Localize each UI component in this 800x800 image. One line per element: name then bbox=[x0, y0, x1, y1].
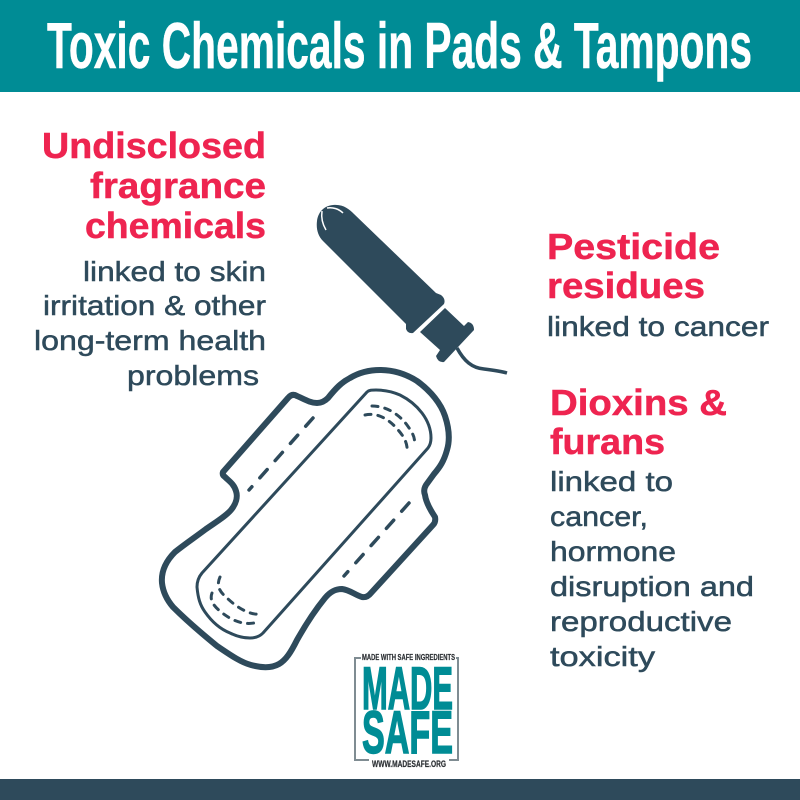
description: fragrance health effects: problems bbox=[127, 360, 259, 391]
heading: pesticide residues bbox=[547, 226, 720, 306]
logo wordmark made: MADE bbox=[362, 655, 453, 722]
logo top text: MADE WITH SAFE INGREDIENTS bbox=[362, 653, 455, 662]
description: fragrance health effects: long-term health bbox=[34, 325, 266, 356]
heading: pesticide residues: Pesticide bbox=[547, 226, 720, 267]
description: fragrance health effects bbox=[34, 256, 266, 391]
text block: dioxins and furans bbox=[550, 382, 754, 672]
description: dioxin health effects: linked to bbox=[550, 466, 673, 497]
logo: made safe bbox=[355, 653, 458, 769]
heading: undisclosed fragrance chemicals bbox=[42, 125, 266, 246]
description: dioxin health effects: reproductive bbox=[550, 606, 732, 637]
pad wing stitching bbox=[249, 418, 313, 490]
pad inner outline bbox=[197, 390, 431, 638]
pad top stitching bbox=[372, 406, 415, 445]
description: dioxin health effects: disruption and bbox=[550, 571, 754, 602]
text block: undisclosed fragrance chemicals bbox=[34, 125, 266, 391]
footer bar bbox=[0, 779, 800, 800]
description: dioxin health effects: toxicity bbox=[550, 641, 655, 672]
heading: dioxins and furans bbox=[550, 382, 727, 462]
description: dioxin health effects: cancer, bbox=[550, 501, 648, 532]
icon: tampon bbox=[317, 205, 507, 373]
pad bottom stitching bbox=[211, 593, 254, 623]
description: pesticide health effects: linked to cancer bbox=[547, 311, 769, 342]
heading: dioxins and furans: furans bbox=[550, 421, 665, 462]
heading: dioxins and furans: Dioxins & bbox=[550, 382, 727, 423]
text block: pesticide residues bbox=[547, 226, 769, 342]
icon: sanitary pad bbox=[162, 370, 449, 667]
description: dioxin health effects: hormone bbox=[550, 536, 676, 567]
heading: undisclosed fragrance chemicals: fragrance bbox=[90, 165, 266, 206]
heading: undisclosed fragrance chemicals: Undisclosed bbox=[42, 125, 266, 166]
logo url: WWW.MADESAFE.ORG bbox=[372, 759, 446, 769]
title banner bbox=[0, 0, 800, 92]
heading: pesticide residues: residues bbox=[547, 265, 705, 306]
description: fragrance health effects: irritation & other bbox=[43, 290, 266, 321]
description: dioxin health effects bbox=[550, 466, 754, 672]
description: fragrance health effects: linked to skin bbox=[83, 256, 266, 287]
logo frame bbox=[355, 658, 458, 760]
heading: undisclosed fragrance chemicals: chemicals bbox=[85, 205, 266, 246]
logo wordmark safe: SAFE bbox=[362, 699, 453, 766]
pad outer outline bbox=[162, 370, 449, 667]
